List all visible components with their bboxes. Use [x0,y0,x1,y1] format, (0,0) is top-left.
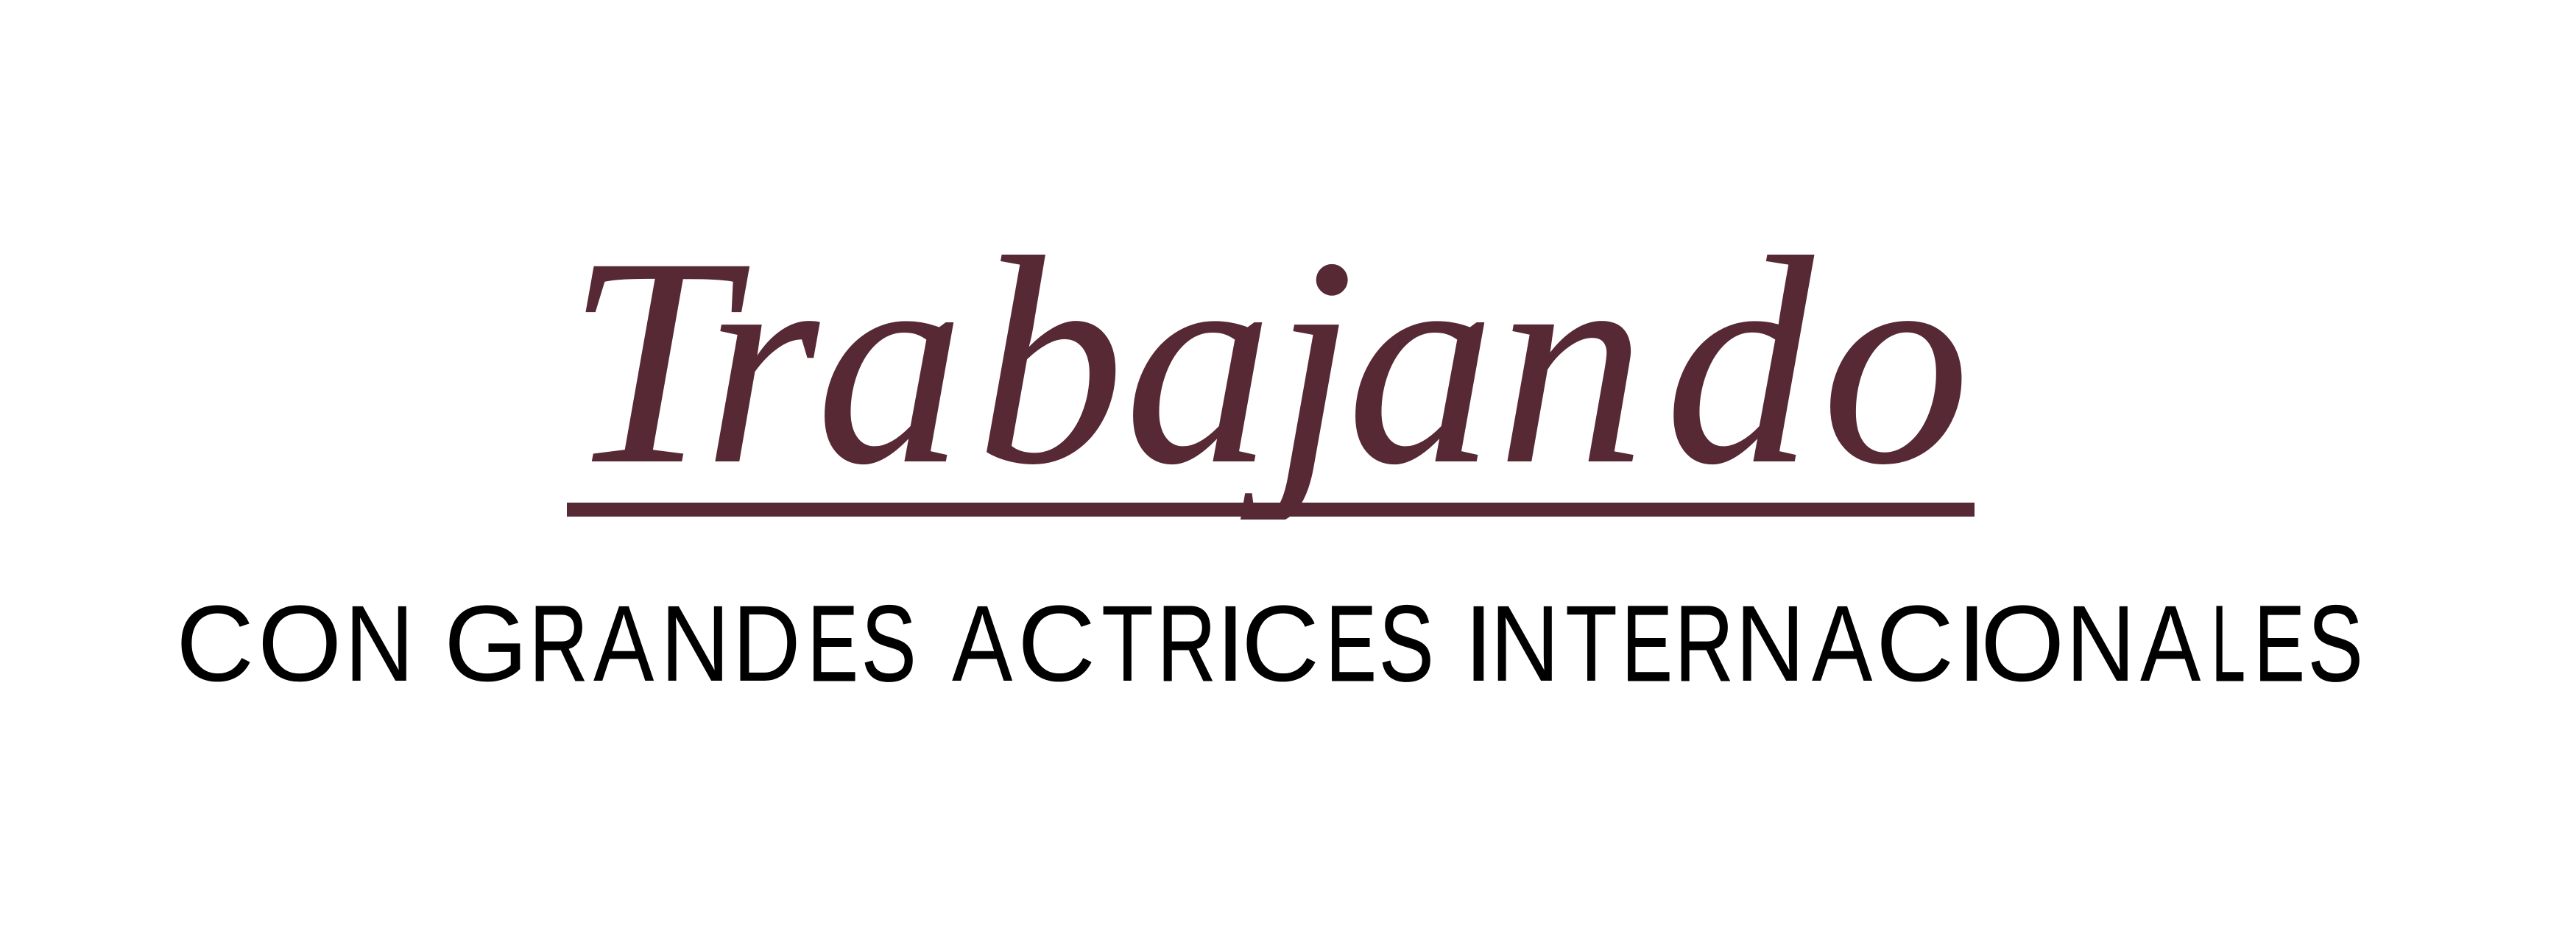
subtitle [176,584,2363,704]
subtitle: I [1957,584,1987,704]
subtitle: T [1565,584,1617,704]
subtitle: E [808,584,858,704]
subtitle: A [2140,584,2201,704]
subtitle: N [2066,584,2135,704]
subtitle: N [1490,584,1559,704]
subtitle: D [733,584,800,704]
subtitle: O [258,584,342,704]
subtitle: R [1675,584,1734,704]
subtitle: N [1735,584,1804,704]
subtitle: L [2212,584,2245,704]
subtitle: S [1379,584,1434,704]
subtitle: S [2308,584,2363,704]
subtitle: N [345,584,414,704]
subtitle: I [1215,584,1246,704]
subtitle: O [1980,584,2064,704]
subtitle: E [1326,584,1377,704]
title and underline artwork [567,255,1975,520]
subtitle: A [593,584,654,704]
subtitle: S [861,584,917,704]
subtitle: I [1464,584,1494,704]
subtitle: C [176,584,254,704]
subtitle: G [444,584,528,704]
subtitle: E [1622,584,1673,704]
subtitle: A [952,584,1012,704]
subtitle: E [2254,584,2305,704]
subtitle: C [1017,584,1095,704]
subtitle: T [1101,584,1154,704]
subtitle: R [529,584,588,704]
title: Trabajando [566,196,1970,527]
subtitle: R [1157,584,1216,704]
subtitle: C [1241,584,1319,704]
subtitle: C [1876,584,1954,704]
subtitle: A [1812,584,1872,704]
title underline [567,503,1975,517]
subtitle: N [660,584,730,704]
